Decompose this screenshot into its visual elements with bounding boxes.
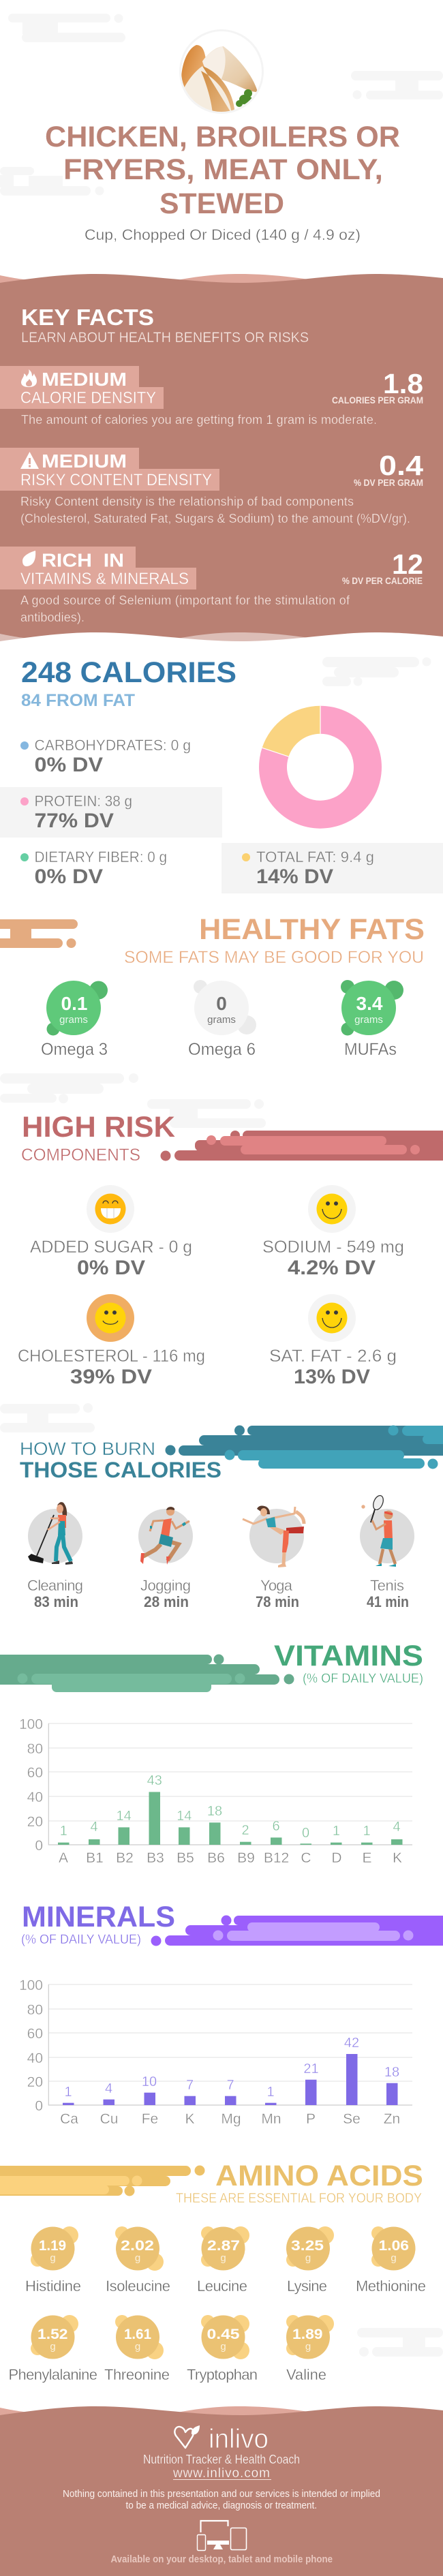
bar chart: vitamins: 0 bbox=[302, 1826, 309, 1841]
macro: dietary fiber: 0% DV bbox=[34, 865, 103, 888]
bar chart: minerals bbox=[19, 1978, 412, 2127]
title bbox=[45, 121, 400, 220]
logo: inlivo heart and wordmark bbox=[174, 2424, 269, 2454]
amino: methionine: 1.06 bbox=[379, 2238, 409, 2254]
heading: how to burn those calories: THOSE CALORIES bbox=[20, 1458, 222, 1482]
item: sodium bbox=[262, 1185, 404, 1279]
bar chart: minerals: 10 bbox=[142, 2074, 157, 2089]
amino: histidine bbox=[25, 2226, 81, 2295]
bar chart: minerals: 1 bbox=[64, 2085, 72, 2100]
bar chart: vitamins: 60 bbox=[27, 1765, 43, 1781]
amino: phenylalanine: 1.52 bbox=[37, 2327, 68, 2342]
heading: high risk: COMPONENTS bbox=[21, 1146, 140, 1165]
activity: jogging bbox=[138, 1507, 193, 1610]
activity: tennis: Tenis bbox=[370, 1577, 404, 1594]
amino: lysine bbox=[286, 2226, 334, 2295]
bar chart: minerals: 42 bbox=[344, 2036, 359, 2051]
amino: valine: Valine bbox=[286, 2366, 326, 2383]
activity: yoga: Yoga bbox=[260, 1577, 293, 1594]
heading: 248 calories: 84 FROM FAT bbox=[21, 691, 135, 710]
activity: cleaning: 83 min bbox=[34, 1593, 78, 1610]
fact: rich in vitamins and minerals: A good source of Selenium (important for the stimulation of bbox=[20, 594, 350, 607]
fact: risky content density: RISKY CONTENT DENSITY bbox=[20, 471, 212, 489]
bubble: omega 3 bbox=[41, 981, 108, 1059]
bar chart: minerals: Mg bbox=[221, 2111, 241, 2127]
bar chart: minerals: 100 bbox=[19, 1978, 43, 1993]
heading: amino acids bbox=[176, 2160, 423, 2206]
panel: healthy fats bbox=[0, 913, 425, 1059]
bar chart: vitamins: B1 bbox=[86, 1850, 104, 1866]
donut chart bbox=[259, 706, 382, 829]
amino: methionine: g bbox=[391, 2252, 397, 2264]
amino: leucine: 2.87 bbox=[207, 2238, 240, 2254]
bar chart: minerals: 7 bbox=[226, 2078, 234, 2093]
panel: amino acids bbox=[0, 2160, 426, 2383]
stat: 12 percent DV per calorie: % DV PER CALORIE bbox=[342, 576, 423, 586]
bar chart: vitamins: A bbox=[59, 1850, 68, 1866]
amino: isoleucine: g bbox=[135, 2252, 140, 2264]
bubble: MUFAs: MUFAs bbox=[344, 1040, 397, 1059]
heading: vitamins bbox=[274, 1640, 423, 1686]
bar chart: vitamins: E bbox=[362, 1850, 372, 1866]
bubble: omega 6: 0 bbox=[216, 993, 227, 1014]
amino: lysine: Lysine bbox=[287, 2278, 327, 2295]
heading: vitamins: VITAMINS bbox=[274, 1640, 423, 1672]
bar chart: minerals: 7 bbox=[186, 2078, 194, 2093]
title: FRYERS, MEAT ONLY, bbox=[63, 153, 383, 186]
fact: risky content density: MEDIUM bbox=[42, 450, 127, 472]
bar chart: minerals: 80 bbox=[27, 2002, 43, 2018]
amino: threonine: g bbox=[135, 2341, 140, 2352]
fact: calorie density: CALORIE DENSITY bbox=[20, 388, 156, 408]
amino: isoleucine bbox=[106, 2226, 170, 2295]
activity: jogging: Jogging bbox=[140, 1577, 191, 1594]
item: cholesterol bbox=[18, 1294, 205, 1388]
amino: methionine bbox=[356, 2226, 426, 2295]
panel: high risk components bbox=[18, 1111, 443, 1388]
amino: methionine: Methionine bbox=[356, 2278, 426, 2295]
stat: 1.8 calories per gram: CALORIES PER GRAM bbox=[332, 395, 423, 405]
amino: histidine: Histidine bbox=[25, 2278, 81, 2295]
bar chart: vitamins: 1 bbox=[60, 1824, 67, 1839]
amino: isoleucine: Isoleucine bbox=[106, 2278, 170, 2295]
macro: dietary fiber: DIETARY FIBER: 0 g bbox=[34, 848, 167, 865]
bar chart: minerals: 4 bbox=[105, 2081, 112, 2096]
bar chart: vitamins: 80 bbox=[27, 1741, 43, 1757]
heading: minerals: MINERALS bbox=[22, 1901, 175, 1933]
macro: carbohydrates: 0% DV bbox=[34, 754, 103, 776]
title: STEWED bbox=[159, 187, 284, 220]
title: CHICKEN, BROILERS OR bbox=[45, 121, 400, 153]
item: sodium: SODIUM - 549 mg bbox=[262, 1238, 404, 1257]
amino: isoleucine: 2.02 bbox=[121, 2238, 154, 2254]
bar chart: minerals: K bbox=[185, 2111, 195, 2127]
icon: flame bbox=[21, 369, 37, 387]
serving size: Cup, Chopped Or Diced (140 g / 4.9 oz) bbox=[85, 226, 361, 243]
item: added sugar bbox=[30, 1185, 192, 1279]
fact: calorie density bbox=[0, 366, 423, 427]
bar chart: minerals: Se bbox=[343, 2111, 361, 2127]
macro: carbohydrates: CARBOHYDRATES: 0 g bbox=[34, 737, 191, 754]
panel: minerals bbox=[19, 1901, 443, 2127]
logo: inlivo heart and wordmark: inlivo bbox=[209, 2424, 269, 2454]
item: added sugar: 0% DV bbox=[77, 1257, 145, 1279]
fact: rich in vitamins and minerals: VITAMINS & MINERALS bbox=[20, 570, 189, 588]
fact: rich in vitamins and minerals bbox=[0, 547, 423, 624]
amino: lysine: g bbox=[305, 2252, 311, 2264]
fact: calorie density: MEDIUM bbox=[42, 369, 127, 390]
amino: phenylalanine: g bbox=[50, 2341, 56, 2352]
heading: key facts: LEARN ABOUT HEALTH BENEFITS OR RISKS bbox=[21, 330, 309, 346]
fact: risky content density: Risky Content density is the relationship of bad components bbox=[20, 495, 354, 508]
macro: protein: PROTEIN: 38 g bbox=[34, 793, 132, 810]
bar chart: vitamins: C bbox=[301, 1850, 311, 1866]
header bbox=[45, 29, 400, 243]
bar chart: vitamins: 0 bbox=[35, 1838, 43, 1854]
heading: how to burn those calories: HOW TO BURN bbox=[20, 1439, 155, 1459]
macro: total fat: TOTAL FAT: 9.4 g bbox=[256, 848, 374, 865]
bar chart: vitamins: 1 bbox=[333, 1824, 340, 1839]
panel: vitamins bbox=[0, 1640, 423, 1866]
disclaimer: to be a medical advice, diagnosis or treatment. bbox=[125, 2500, 317, 2511]
bubble: omega 6 bbox=[188, 980, 256, 1059]
bar chart: vitamins: 14 bbox=[116, 1809, 132, 1824]
amino: leucine: g bbox=[220, 2252, 226, 2264]
amino: tryptophan: Tryptophan bbox=[187, 2366, 258, 2383]
bubble: omega 6: grams bbox=[207, 1014, 236, 1026]
macro: dietary fiber bbox=[20, 848, 167, 888]
amino: tryptophan: 0.45 bbox=[207, 2327, 240, 2342]
bar chart: minerals: 18 bbox=[384, 2065, 399, 2080]
bar chart: vitamins: B12 bbox=[264, 1850, 289, 1866]
amino: lysine: 3.25 bbox=[291, 2238, 324, 2254]
heading: amino acids: THESE ARE ESSENTIAL FOR YOUR BODY bbox=[176, 2191, 422, 2206]
bar chart: minerals: 60 bbox=[27, 2026, 43, 2042]
bubble: omega 6: Omega 6 bbox=[188, 1040, 256, 1059]
amino: threonine: Threonine bbox=[104, 2366, 170, 2383]
heading: healthy fats: SOME FATS MAY BE GOOD FOR YOU bbox=[124, 948, 424, 967]
amino: leucine: Leucine bbox=[197, 2278, 247, 2295]
bar chart: vitamins: 40 bbox=[27, 1790, 43, 1805]
bar chart: minerals: Ca bbox=[60, 2111, 78, 2127]
stat: 12 percent DV per calorie: 12 bbox=[392, 549, 423, 580]
item: saturated fat bbox=[269, 1294, 397, 1388]
macro: protein bbox=[0, 787, 222, 838]
heading: 248 calories: 248 CALORIES bbox=[21, 656, 236, 689]
bar chart: minerals: 0 bbox=[35, 2098, 43, 2114]
bar chart: minerals: 20 bbox=[27, 2074, 43, 2090]
bubble: MUFAs: 3.4 bbox=[356, 993, 383, 1014]
bar chart: vitamins: B6 bbox=[207, 1850, 225, 1866]
bar chart: vitamins: 43 bbox=[147, 1773, 162, 1788]
fact: rich in vitamins and minerals: antibodies). bbox=[20, 611, 85, 624]
bar chart: vitamins: 4 bbox=[90, 1820, 98, 1835]
heading: how to burn those calories bbox=[20, 1439, 222, 1482]
bubble: omega 3: Omega 3 bbox=[41, 1040, 108, 1059]
amino: histidine: 1.19 bbox=[39, 2238, 66, 2254]
bar chart: vitamins: 20 bbox=[27, 1814, 43, 1830]
bar chart: minerals: Cu bbox=[100, 2111, 118, 2127]
bar chart: vitamins: B9 bbox=[237, 1850, 255, 1866]
macro: total fat bbox=[222, 843, 443, 893]
bar chart: vitamins: D bbox=[331, 1850, 342, 1866]
activity: tennis: 41 min bbox=[367, 1593, 409, 1610]
amino: tryptophan: g bbox=[220, 2341, 226, 2352]
bar chart: minerals: P bbox=[306, 2111, 316, 2127]
bubble: omega 3: 0.1 bbox=[61, 993, 87, 1014]
bar chart: vitamins: B5 bbox=[177, 1850, 194, 1866]
heading: amino acids: AMINO ACIDS bbox=[215, 2160, 423, 2192]
amino: phenylalanine bbox=[8, 2315, 97, 2383]
tagline: Nutrition Tracker & Health Coach bbox=[143, 2453, 300, 2466]
amino: valine: 1.89 bbox=[292, 2327, 323, 2342]
bar chart: vitamins: B2 bbox=[116, 1850, 134, 1866]
heading: high risk: HIGH RISK bbox=[22, 1111, 175, 1144]
heading: minerals: (% OF DAILY VALUE) bbox=[21, 1933, 141, 1947]
bar chart: minerals: 21 bbox=[303, 2061, 319, 2076]
disclaimer bbox=[63, 2488, 380, 2511]
bubble: MUFAs: grams bbox=[354, 1014, 383, 1026]
bar chart: minerals: 1 bbox=[266, 2085, 275, 2100]
amino: leucine bbox=[197, 2226, 249, 2295]
bar chart: vitamins bbox=[19, 1717, 412, 1866]
activity: cleaning: Cleaning bbox=[27, 1577, 83, 1594]
item: saturated fat: 13% DV bbox=[294, 1366, 370, 1388]
activity: tennis bbox=[360, 1494, 414, 1610]
stat: 0.4 percent DV per gram: 0.4 bbox=[379, 450, 423, 481]
item: saturated fat: SAT. FAT - 2.6 g bbox=[269, 1347, 397, 1366]
amino: histidine: g bbox=[50, 2252, 56, 2264]
bar chart: vitamins: 6 bbox=[272, 1819, 280, 1834]
macro: protein: 77% DV bbox=[34, 810, 114, 832]
stat: 1.8 calories per gram: 1.8 bbox=[383, 368, 423, 399]
food photo: chicken pieces bbox=[179, 29, 264, 114]
icon: desktop, tablet and phone bbox=[198, 2521, 247, 2550]
bar chart: minerals: Zn bbox=[384, 2111, 400, 2127]
item: sodium: 4.2% DV bbox=[288, 1257, 376, 1279]
bar chart: vitamins: 1 bbox=[363, 1824, 371, 1839]
activity: yoga bbox=[243, 1506, 304, 1610]
amino: tryptophan bbox=[187, 2315, 258, 2383]
amino: threonine bbox=[104, 2315, 170, 2383]
bar chart: vitamins: K bbox=[393, 1850, 402, 1866]
stat: 1.8 calories per gram bbox=[332, 368, 423, 405]
panel: key facts bbox=[0, 274, 443, 651]
icon: leaf bbox=[22, 551, 35, 566]
heading: key facts bbox=[21, 305, 309, 346]
activity: yoga: 78 min bbox=[256, 1593, 299, 1610]
macro: total fat: 14% DV bbox=[256, 865, 333, 888]
stat: 0.4 percent DV per gram: % DV PER GRAM bbox=[354, 478, 423, 488]
bar chart: vitamins: 18 bbox=[207, 1804, 222, 1819]
bar chart: vitamins: 4 bbox=[393, 1820, 401, 1835]
activity: cleaning bbox=[27, 1502, 83, 1610]
heading: healthy fats bbox=[124, 913, 425, 967]
item: added sugar: ADDED SUGAR - 0 g bbox=[30, 1238, 192, 1257]
item: cholesterol: 39% DV bbox=[70, 1366, 152, 1388]
bar chart: minerals: Mn bbox=[261, 2111, 281, 2127]
bar chart: minerals: 40 bbox=[27, 2051, 43, 2066]
bar chart: vitamins: 100 bbox=[19, 1717, 43, 1732]
amino: phenylalanine: Phenylalanine bbox=[8, 2366, 97, 2383]
bar chart: minerals: Fe bbox=[142, 2111, 158, 2127]
item: cholesterol: CHOLESTEROL - 116 mg bbox=[18, 1347, 205, 1366]
amino: valine bbox=[286, 2315, 334, 2383]
icon: warning triangle bbox=[20, 452, 39, 469]
heading: healthy fats: HEALTHY FATS bbox=[199, 913, 425, 946]
fact: risky content density: (Cholesterol, Saturated Fat, Sugars & Sodium) to the amount (%DV/gr). bbox=[20, 512, 410, 525]
footer bbox=[0, 2406, 443, 2576]
disclaimer: Nothing contained in this presentation and our services is intended or implied bbox=[63, 2488, 380, 2500]
heading: vitamins: (% OF DAILY VALUE) bbox=[303, 1672, 423, 1686]
website link: www.inlivo.com bbox=[172, 2466, 270, 2481]
macro: carbohydrates bbox=[20, 737, 191, 776]
bubble: omega 3: grams bbox=[59, 1014, 88, 1026]
stat: 12 percent DV per calorie bbox=[342, 549, 423, 586]
stat: 0.4 percent DV per gram bbox=[354, 450, 423, 488]
heading: high risk bbox=[21, 1111, 175, 1165]
panel: calories bbox=[0, 656, 443, 893]
amino: valine: g bbox=[305, 2341, 311, 2352]
fact: risky content density bbox=[0, 448, 423, 525]
activity: jogging: 28 min bbox=[144, 1593, 189, 1610]
bar chart: vitamins: 2 bbox=[241, 1823, 249, 1838]
bar chart: vitamins: B3 bbox=[147, 1850, 164, 1866]
bar chart: vitamins: 14 bbox=[177, 1809, 192, 1824]
bubble: MUFAs bbox=[341, 980, 403, 1059]
fact: rich in vitamins and minerals: RICH IN bbox=[42, 549, 124, 571]
panel: how to burn those calories bbox=[20, 1426, 443, 1610]
heading: 248 calories bbox=[21, 656, 236, 710]
availability note: Available on your desktop, tablet and mobile phone bbox=[110, 2554, 333, 2565]
amino: threonine: 1.61 bbox=[124, 2327, 151, 2342]
fact: calorie density: The amount of calories you are getting from 1 gram is moderate. bbox=[21, 413, 377, 427]
heading: key facts: KEY FACTS bbox=[21, 305, 154, 330]
